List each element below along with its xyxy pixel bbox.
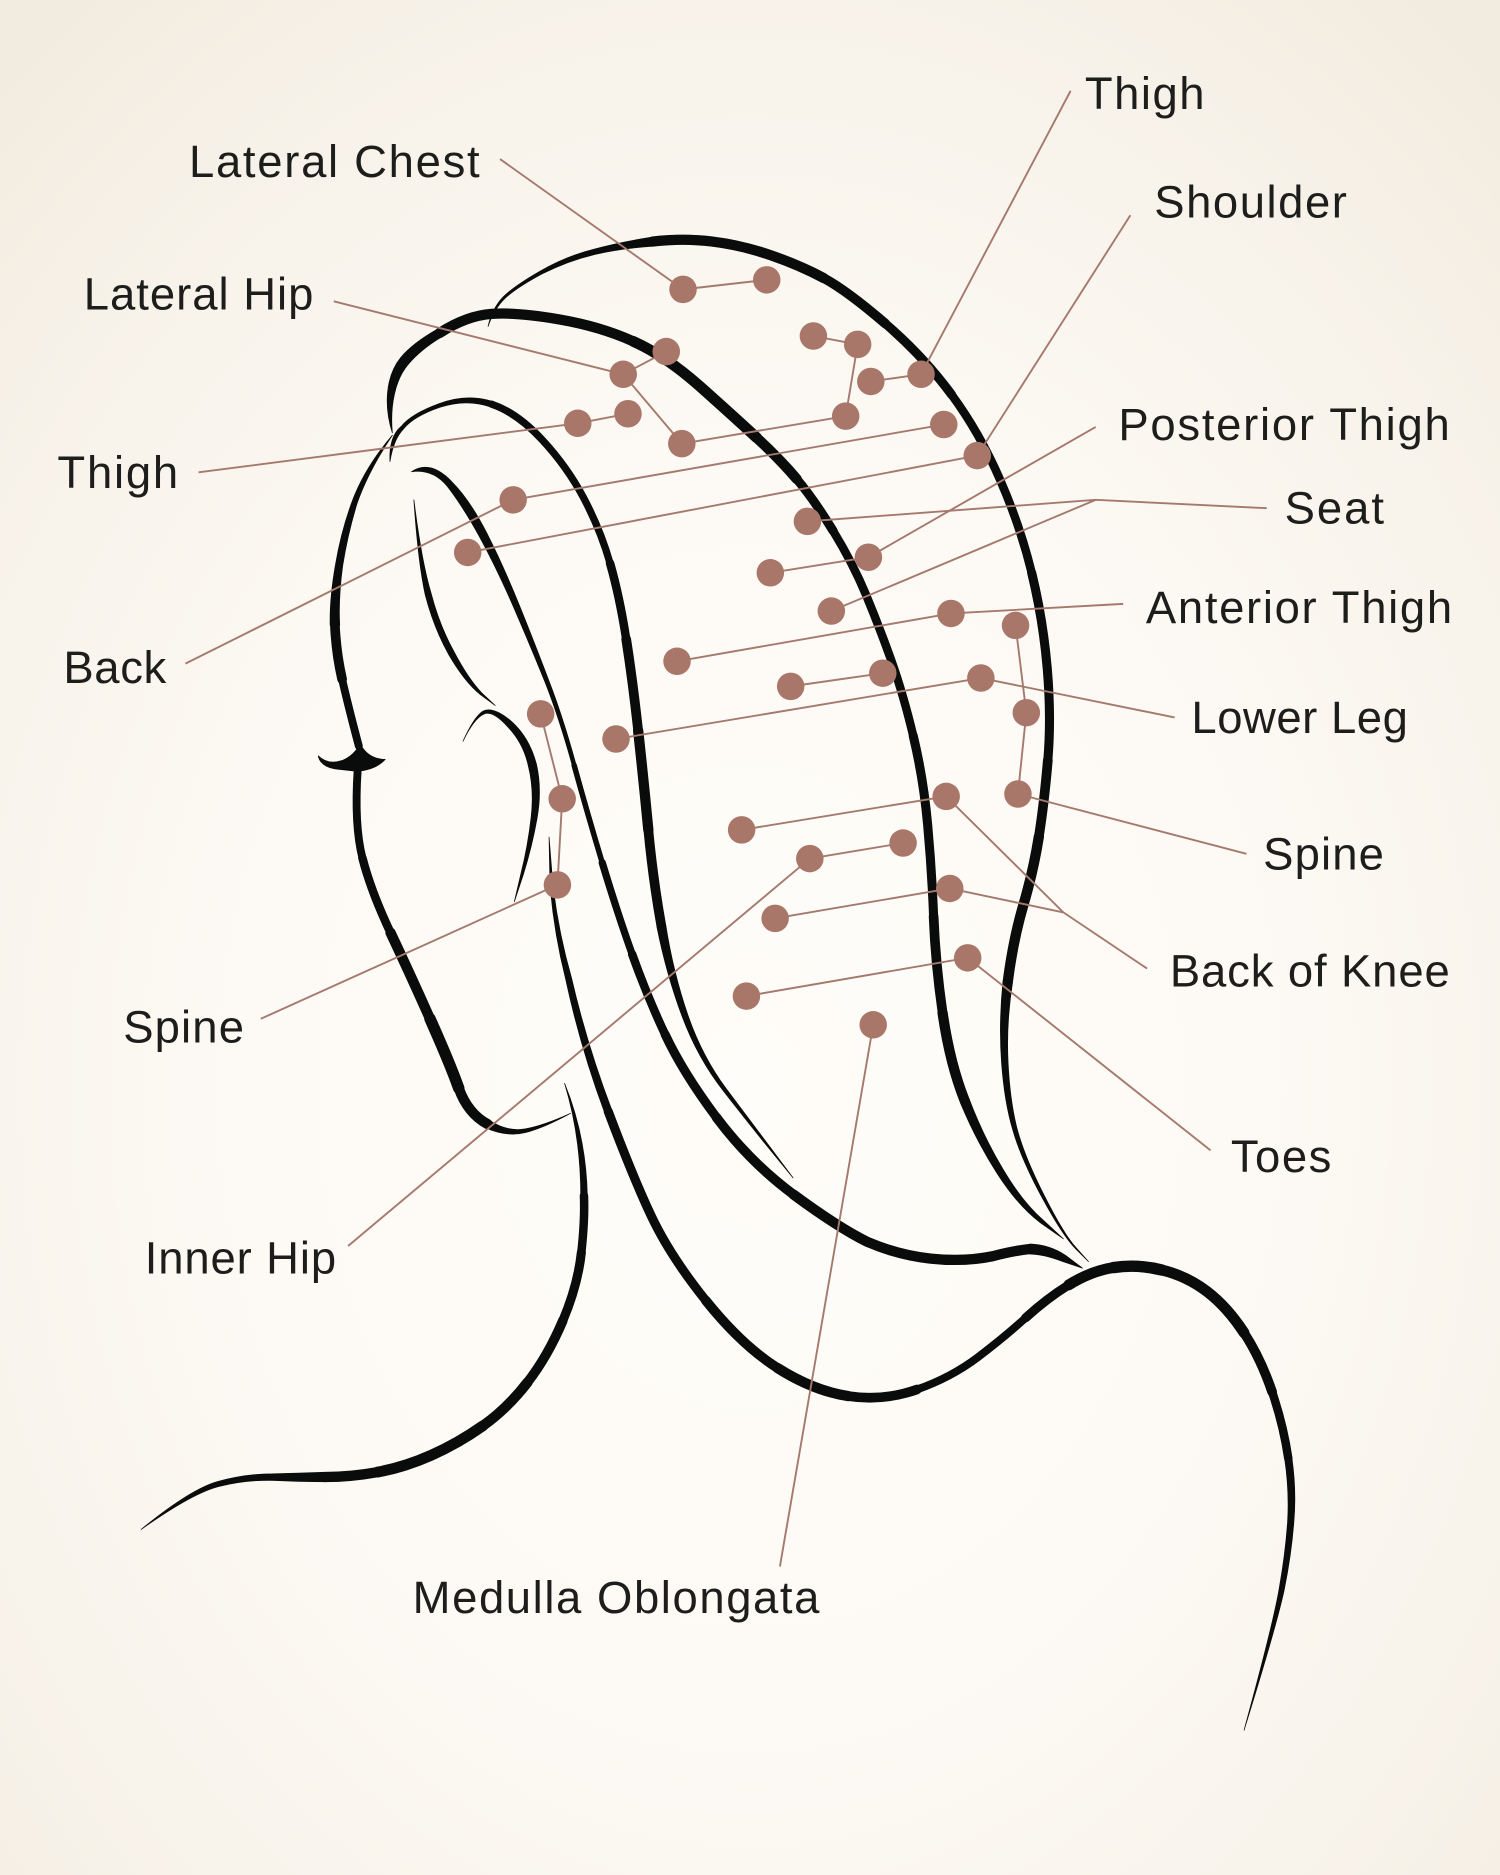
face profile: forehead bbox=[330, 435, 392, 746]
line: thigh top right bbox=[871, 91, 1071, 381]
leader lines connecting labels to points bbox=[185, 91, 1267, 1566]
line: back of knee bbox=[742, 796, 1147, 969]
line: toes bbox=[746, 958, 1211, 1150]
hair strand: outer back of head bbox=[488, 237, 1089, 1262]
neck and chest bbox=[141, 1083, 587, 1529]
back of neck and shoulder bbox=[549, 837, 1295, 1730]
line: shoulder bbox=[468, 215, 1130, 552]
line: thigh left bbox=[199, 414, 628, 472]
label: Lateral Hip: Lateral Hip bbox=[84, 269, 313, 320]
line: spine right bbox=[1016, 625, 1246, 854]
line: back bbox=[185, 425, 944, 664]
face profile: nose to chin bbox=[357, 770, 571, 1134]
hair strand: second layer bbox=[387, 314, 1063, 1239]
label: Back of Knee: Back of Knee bbox=[1170, 946, 1450, 997]
label: Anterior Thigh: Anterior Thigh bbox=[1146, 582, 1452, 633]
line: anterior thigh bbox=[677, 604, 1123, 661]
hair strand: third layer bbox=[390, 398, 793, 1178]
line: lower leg bbox=[616, 678, 1175, 739]
line: inner hip bbox=[348, 843, 903, 1246]
line: pair below seat bbox=[791, 673, 883, 686]
label: Lateral Chest: Lateral Chest bbox=[189, 136, 480, 187]
icon: closed eye lashes bbox=[318, 744, 385, 771]
line: posterior thigh bbox=[770, 427, 1096, 573]
label: Back: Back bbox=[63, 642, 167, 693]
label: Spine (right): Spine bbox=[1263, 828, 1384, 879]
line: lateral chest bbox=[500, 159, 767, 289]
line: lateral hip bbox=[334, 301, 858, 444]
label: Seat: Seat bbox=[1285, 483, 1384, 534]
line drawing: head and hair silhouette bbox=[141, 237, 1295, 1730]
label: Lower Leg: Lower Leg bbox=[1191, 692, 1408, 743]
label: Inner Hip: Inner Hip bbox=[145, 1233, 336, 1284]
label: Thigh (left): Thigh bbox=[57, 447, 178, 498]
line: spine left bbox=[261, 714, 562, 1019]
label: Spine (left): Spine bbox=[123, 1002, 244, 1053]
line: medulla oblongata bbox=[780, 1025, 873, 1566]
line: seat bbox=[807, 500, 1267, 611]
label: Shoulder: Shoulder bbox=[1154, 177, 1347, 228]
label: Posterior Thigh: Posterior Thigh bbox=[1118, 399, 1450, 450]
label: Toes: Toes bbox=[1231, 1131, 1331, 1182]
hair strand: front lock to shoulder bbox=[411, 467, 1083, 1268]
label: Medulla Oblongata: Medulla Oblongata bbox=[413, 1572, 820, 1623]
ear bbox=[463, 710, 539, 902]
label: Thigh (top right): Thigh bbox=[1085, 68, 1205, 119]
temple curve bbox=[414, 500, 495, 706]
reflex point markers bbox=[454, 266, 1040, 1039]
